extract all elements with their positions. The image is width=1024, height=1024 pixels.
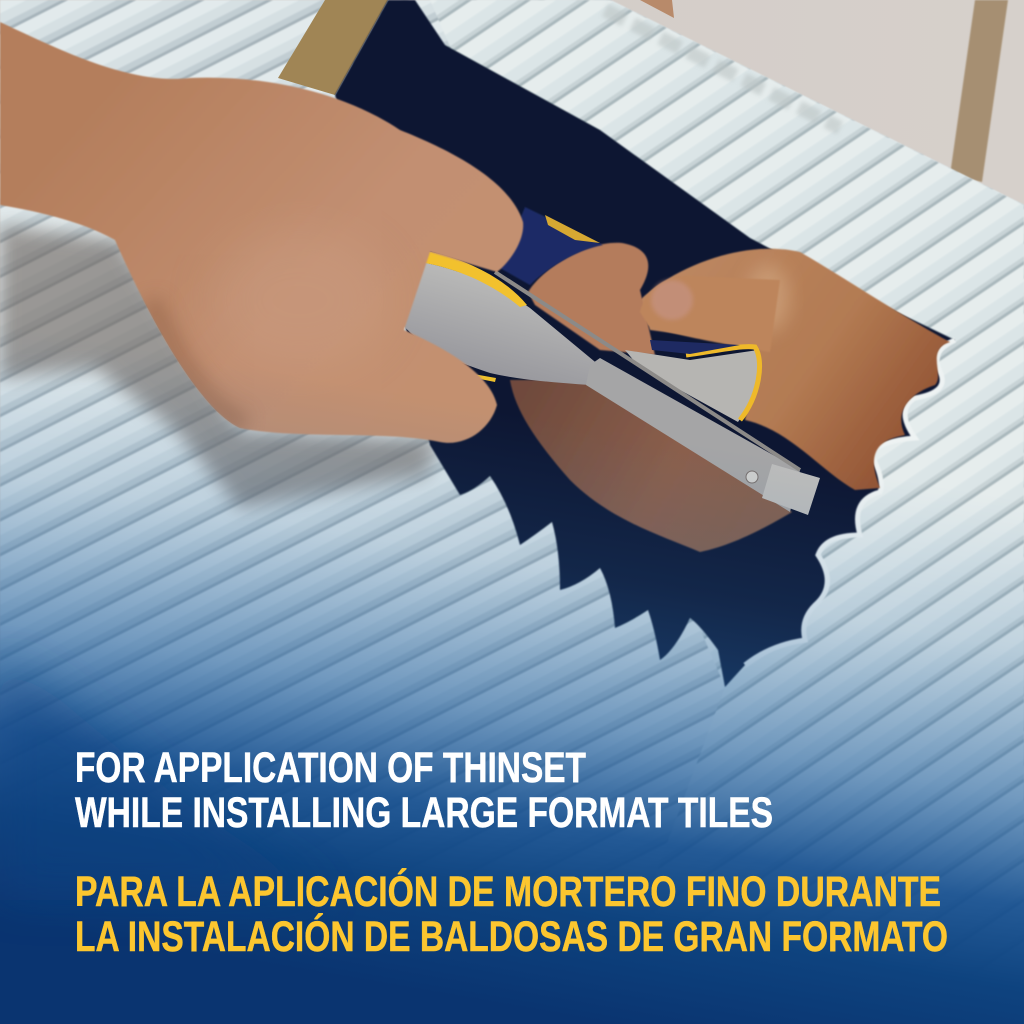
thumbnail: [651, 280, 693, 320]
wood strip on wall: [950, 0, 1008, 182]
yellow grip accent: [420, 250, 527, 307]
dark trowel blade area: [335, 0, 955, 687]
hand shape: [0, 22, 523, 443]
navy sliver: [650, 340, 740, 354]
knuckle shadow: [150, 300, 245, 425]
silver front grip: [403, 262, 600, 385]
steel bar: [586, 358, 800, 512]
right hand: [510, 243, 950, 552]
crumbly mortar edge: [605, 10, 840, 128]
mortar lumps along the cut edge: [745, 340, 955, 665]
bar end cap: [762, 464, 820, 515]
lower yellow accent: [462, 372, 496, 382]
yellow handle lettering: [545, 215, 600, 243]
back of hand highlight: [210, 230, 390, 370]
yellow rim: [686, 347, 760, 420]
bright tendon highlight: [746, 264, 790, 332]
mortar surface: right ridges: [430, 0, 1024, 1024]
grip body: [625, 350, 758, 422]
blue trowel handle: [500, 207, 603, 285]
dark lower left mortar corner: [0, 660, 330, 900]
Spanish caption: [75, 867, 948, 961]
English caption: [75, 744, 773, 837]
English caption: FOR APPLICATION OF THINSET: [75, 744, 586, 792]
trowel tang and handle: [403, 250, 820, 515]
back fingers: [528, 243, 655, 355]
rear handle grip: [625, 340, 760, 422]
trowel blade top: [278, 0, 388, 95]
left hand and arm: [0, 22, 523, 443]
thumb: [640, 276, 780, 352]
shadow under left hand: [0, 225, 440, 508]
fingers behind mortar at top edge: [640, 0, 674, 18]
upper wrist and palm: [640, 249, 950, 490]
lower palm and fingers: [510, 380, 792, 552]
bar top edge: [495, 272, 800, 470]
English caption: WHILE INSTALLING LARGE FORMAT TILES: [75, 789, 773, 837]
hand shading: [144, 297, 249, 429]
rivet: [746, 471, 758, 483]
